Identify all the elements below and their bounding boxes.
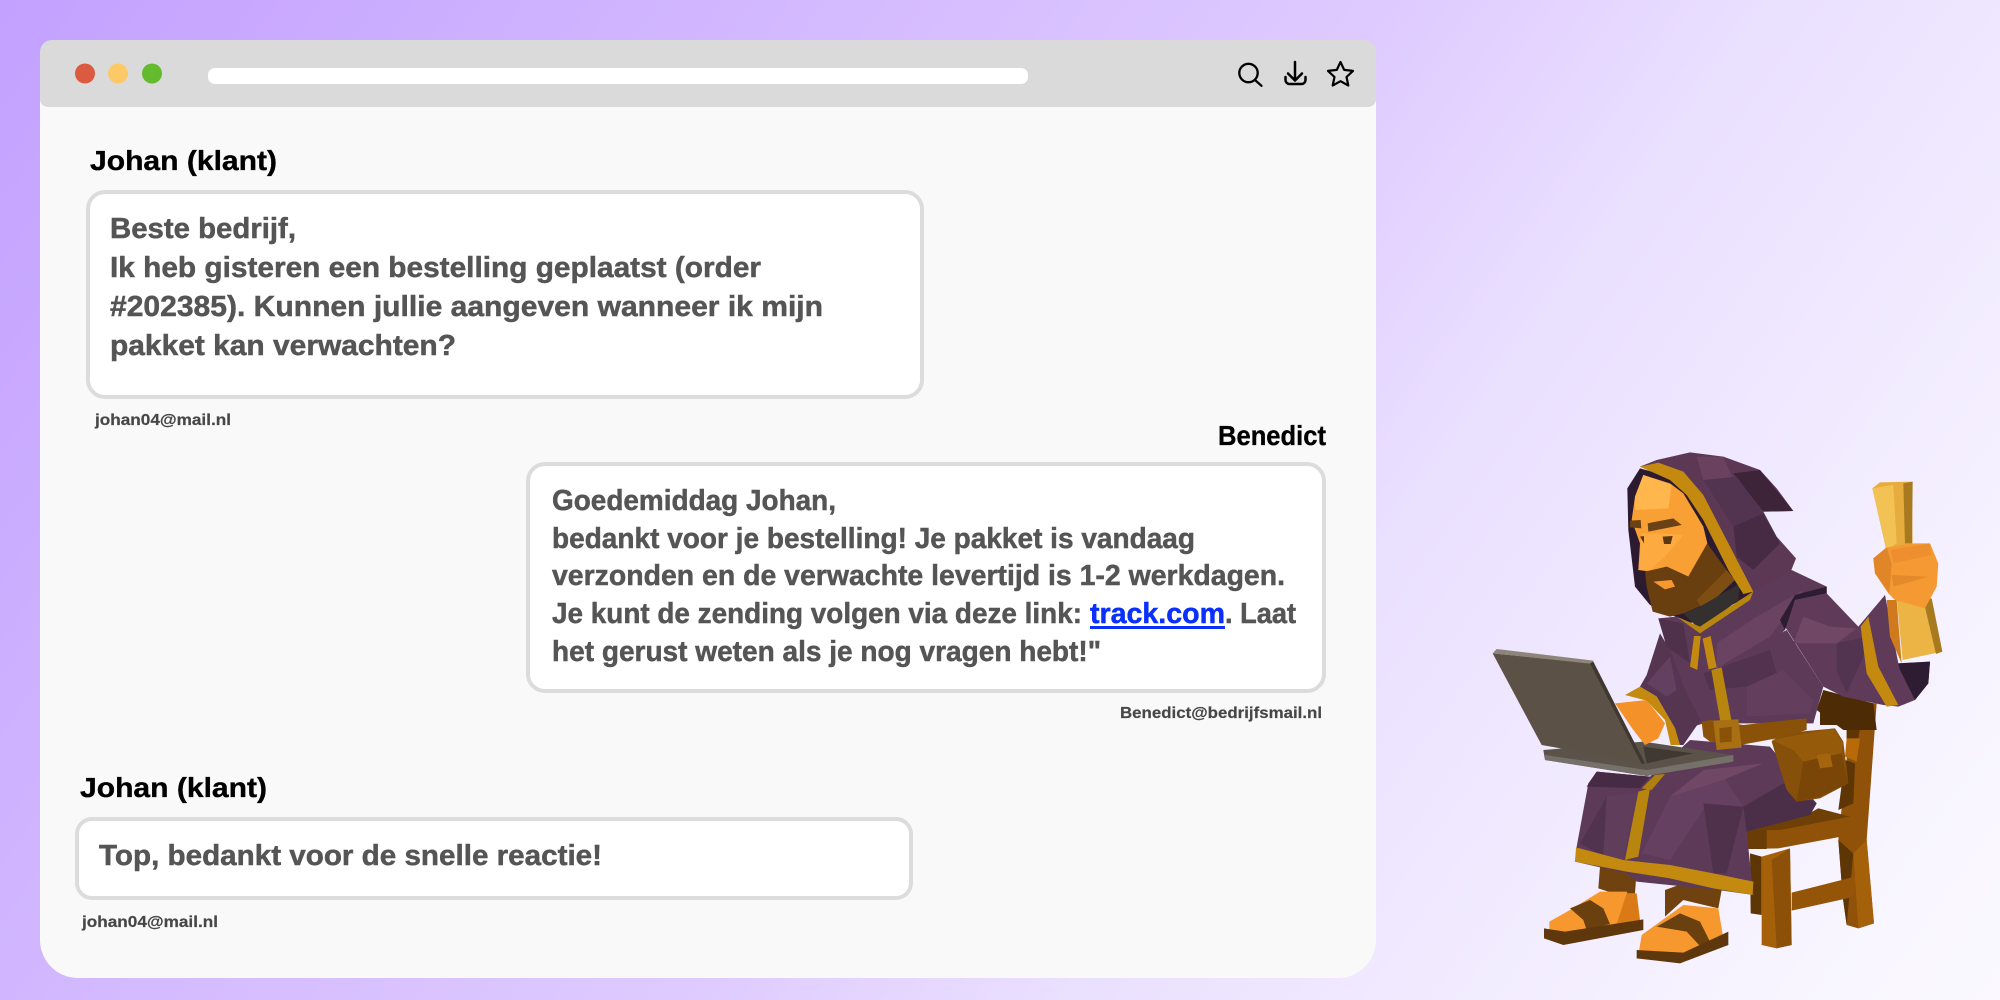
belt and pouch (1702, 718, 1848, 802)
beard (1645, 543, 1735, 617)
message bubble (88, 192, 922, 397)
laptop screen (1493, 649, 1645, 764)
message bubble: Goedemiddag Johan, (552, 485, 836, 517)
window control dots (75, 64, 162, 84)
sender name: Johan (klant) (80, 772, 267, 803)
link: track.com (1090, 598, 1225, 630)
cape (1658, 570, 1827, 668)
left sleeve (1625, 633, 1701, 745)
message bubble: Ik heb gisteren een bestelling geplaatst (order (110, 252, 761, 284)
chair (1747, 700, 1877, 948)
hood back (1627, 468, 1753, 623)
collar tabs (1690, 636, 1717, 670)
message bubble (77, 819, 911, 898)
icon: search (1239, 64, 1262, 86)
belt (1702, 718, 1807, 750)
address bar (208, 68, 1028, 84)
upper body (1493, 452, 1942, 764)
message bubble: Beste bedrijf, (110, 213, 296, 245)
message 3: Johan (77, 772, 911, 931)
sender email: Benedict@bedrijfsmail.nl (1120, 705, 1322, 722)
panel: browser window (40, 40, 1376, 978)
hood (1640, 452, 1796, 593)
right sleeve (1785, 593, 1930, 707)
eyebrows and eye (1630, 518, 1682, 544)
message bubble: #202385). Kunnen jullie aangeven wanneer ik mijn (110, 291, 823, 323)
hand on keyboard (1615, 700, 1665, 745)
message bubble: het gerust weten als je nog vragen hebt!" (552, 636, 1101, 668)
gold hood trim (1640, 463, 1753, 594)
robe lower (1575, 740, 1817, 895)
message 1: Johan (88, 145, 922, 429)
illustration: hooded monk with laptop on a chair (1493, 452, 1942, 963)
browser toolbar (40, 40, 1376, 107)
message 2: Benedict (528, 420, 1326, 722)
gold collar trim (1677, 592, 1753, 633)
message bubble (528, 464, 1324, 691)
sender email: johan04@mail.nl (81, 914, 218, 931)
message bubble: bedankt voor je bestelling! Je pakket is vandaag (552, 523, 1195, 555)
laptop base (1543, 742, 1733, 776)
right hand (1873, 543, 1938, 663)
lower body and chair (1543, 700, 1877, 963)
right sleeve lining (1817, 690, 1877, 730)
message bubble: Je kunt de zending volgen via deze link: (552, 598, 1082, 630)
sender email: johan04@mail.nl (94, 412, 231, 429)
message bubble: pakket kan verwachten? (110, 330, 456, 362)
icon: star (1328, 62, 1353, 86)
scroll (1872, 482, 1942, 660)
message bubble: Top, bedankt voor de snelle reactie! (99, 840, 602, 872)
message bubble: verzonden en de verwachte levertijd is 1-2 werkdagen. (552, 560, 1285, 592)
belt pouch (1772, 728, 1848, 802)
sender name: Benedict (1218, 420, 1326, 451)
icon: download (1286, 62, 1306, 84)
collar (1683, 583, 1740, 630)
torso (1657, 630, 1823, 730)
sender name: Johan (klant) (90, 145, 277, 176)
message bubble: . Laat (1225, 598, 1296, 630)
feet and sandals (1544, 867, 1728, 963)
face (1632, 475, 1707, 577)
